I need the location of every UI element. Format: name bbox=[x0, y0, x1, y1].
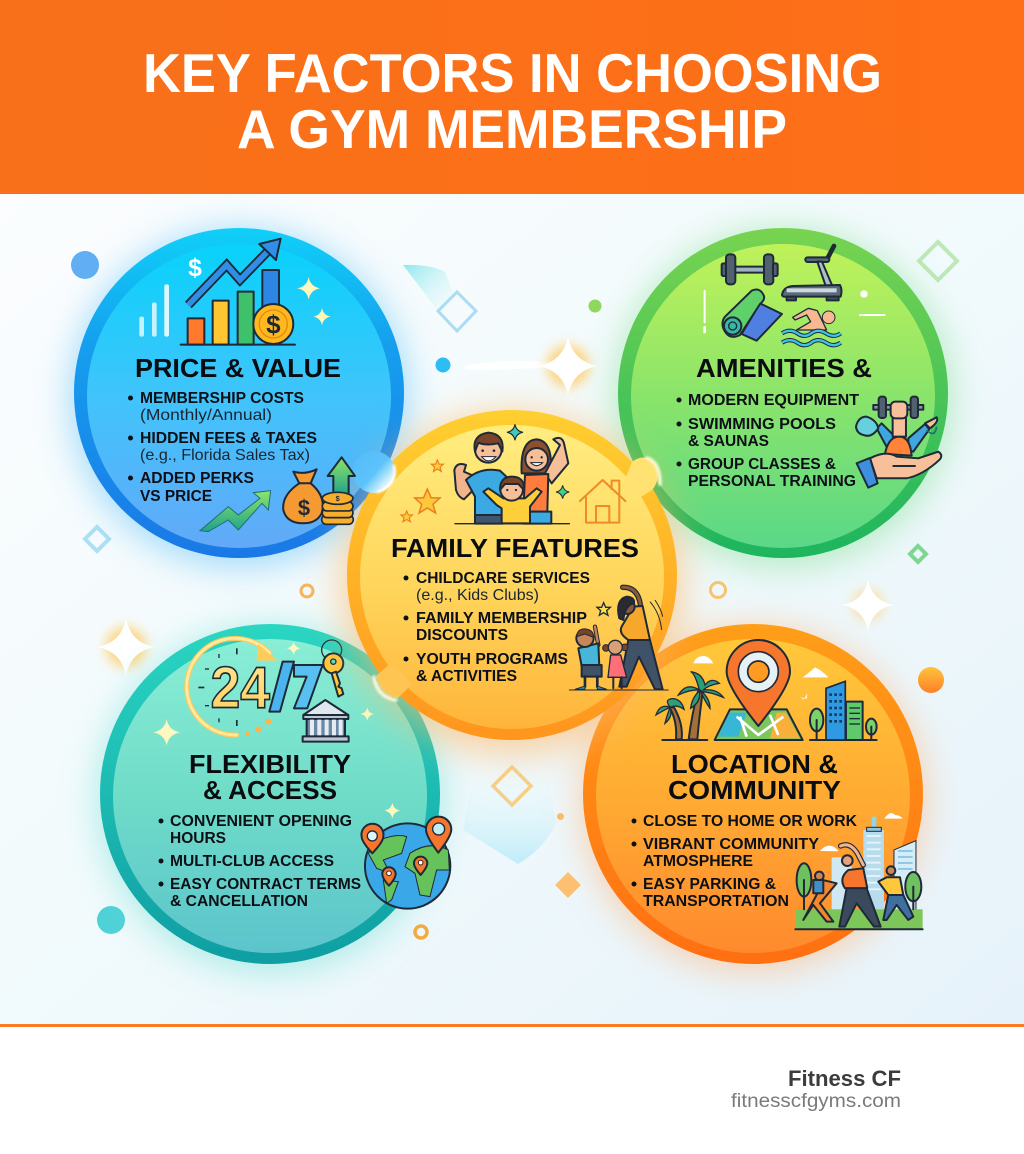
title: A GYM MEMBERSHIP bbox=[237, 98, 787, 160]
panel: location and community bbox=[581, 624, 925, 971]
icon: rising bar chart with coin: $ bbox=[188, 255, 202, 282]
icon: map pin, palm trees and city bbox=[656, 640, 877, 740]
list: price and value: (Monthly/Annual) bbox=[140, 407, 272, 424]
connector: blue tab into yellow bbox=[353, 451, 395, 493]
icon: money bag, coins and arrows bbox=[200, 457, 355, 532]
list: location and community: CLOSE TO HOME OR WORK bbox=[643, 813, 857, 830]
icon: parent and kids stretching bbox=[569, 587, 668, 690]
list: family features: FAMILY MEMBERSHIP bbox=[416, 610, 587, 627]
heading: price and value: PRICE & VALUE bbox=[135, 353, 341, 383]
list: flexibility and access: HOURS bbox=[170, 830, 226, 847]
footer brand: Fitness CF bbox=[788, 1066, 901, 1091]
list: family features: & ACTIVITIES bbox=[416, 668, 517, 685]
icon: happy family with stars and house bbox=[401, 424, 626, 524]
heading: flexibility and access: & ACCESS bbox=[203, 775, 337, 805]
list: price and value: HIDDEN FEES & TAXES bbox=[140, 430, 317, 447]
heading: location and community: LOCATION & bbox=[671, 749, 838, 779]
list: amenities: & SAUNAS bbox=[688, 433, 769, 450]
icon: hand holding gym gear bbox=[856, 397, 941, 488]
heading: location and community bbox=[668, 749, 841, 805]
header banner bbox=[0, 0, 1024, 194]
list: flexibility and access: MULTI-CLUB ACCESS bbox=[170, 853, 334, 870]
list: price and value: (e.g., Florida Sales Tax) bbox=[140, 447, 310, 464]
panel: family features bbox=[200, 410, 684, 755]
list: location and community bbox=[632, 813, 857, 910]
connector: yellow tab into green bbox=[620, 457, 660, 500]
icon: rising bar chart with coin bbox=[139, 239, 331, 345]
page background bbox=[0, 194, 1024, 1024]
list: amenities: GROUP CLASSES & bbox=[688, 456, 836, 473]
heading: flexibility and access: FLEXIBILITY bbox=[189, 749, 351, 779]
list: flexibility and access bbox=[158, 813, 361, 910]
heading: flexibility and access bbox=[189, 749, 351, 805]
heading: amenities: AMENITIES & bbox=[696, 353, 872, 383]
list: family features: CHILDCARE SERVICES bbox=[416, 570, 590, 587]
list: family features: DISCOUNTS bbox=[416, 627, 508, 644]
list: flexibility and access: & CANCELLATION bbox=[170, 893, 308, 910]
icon: people exercising in a city park bbox=[795, 813, 923, 929]
footer background bbox=[0, 1027, 1024, 1154]
icon: money bag, coins and arrows: $ bbox=[298, 495, 310, 520]
icon: 24/7 clock, key and building: 24 bbox=[211, 655, 270, 720]
panel: amenities bbox=[615, 228, 951, 566]
heading: location and community: COMMUNITY bbox=[668, 775, 841, 805]
list: location and community: EASY PARKING & bbox=[643, 876, 776, 893]
list: family features: YOUTH PROGRAMS bbox=[416, 651, 568, 668]
list: amenities bbox=[676, 392, 859, 490]
footer brand bbox=[731, 1066, 901, 1112]
list: family features: (e.g., Kids Clubs) bbox=[416, 587, 539, 604]
panel: price and value bbox=[71, 228, 407, 566]
heading: family features: FAMILY FEATURES bbox=[391, 533, 639, 563]
list: amenities: SWIMMING POOLS bbox=[688, 416, 836, 433]
list: flexibility and access: EASY CONTRACT TERMS bbox=[170, 876, 361, 893]
list: location and community: ATMOSPHERE bbox=[643, 853, 753, 870]
icon: money bag, coins and arrows: $ bbox=[336, 494, 340, 503]
title bbox=[143, 42, 882, 160]
footer rule bbox=[0, 1024, 1024, 1027]
list: price and value: MEMBERSHIP COSTS bbox=[140, 390, 304, 407]
icon: dumbbell, treadmill, mat and swimmer bbox=[703, 246, 886, 345]
connector: yellow tab into teal bbox=[374, 662, 412, 700]
panel: flexibility and access bbox=[98, 624, 451, 971]
list: family features bbox=[404, 570, 590, 685]
list: location and community: VIBRANT COMMUNITY bbox=[643, 836, 819, 853]
icon: 24/7 clock, key and building bbox=[153, 638, 400, 819]
list: amenities: PERSONAL TRAINING bbox=[688, 473, 856, 490]
background decorations bbox=[71, 242, 957, 938]
list: location and community: TRANSPORTATION bbox=[643, 893, 789, 910]
list: amenities: MODERN EQUIPMENT bbox=[688, 392, 859, 409]
footer brand: fitnesscfgyms.com bbox=[731, 1091, 901, 1112]
list: price and value: VS PRICE bbox=[140, 488, 212, 505]
title: KEY FACTORS IN CHOOSING bbox=[143, 42, 882, 104]
icon: rising bar chart with coin: $ bbox=[266, 309, 281, 339]
list: flexibility and access: CONVENIENT OPENING bbox=[170, 813, 352, 830]
icon: globe with map pins bbox=[361, 817, 451, 909]
list: price and value bbox=[128, 390, 317, 505]
list: price and value: ADDED PERKS bbox=[140, 470, 254, 487]
